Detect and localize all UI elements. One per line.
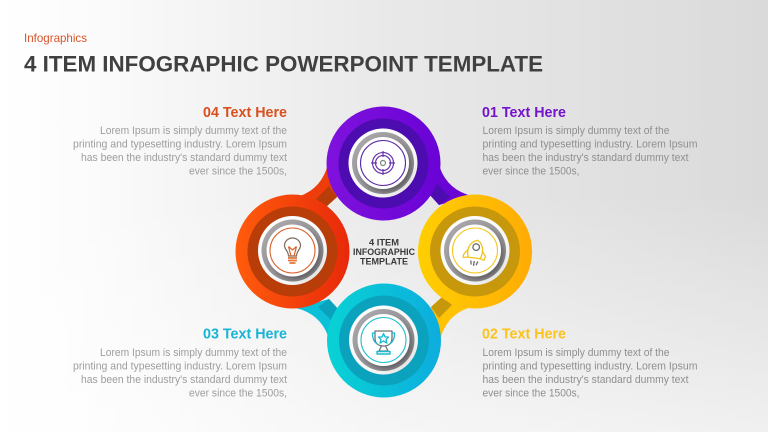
connector: yellow to cyan side bbox=[431, 297, 468, 340]
body 02: Lorem Ipsum is simply dummy text of the bbox=[482, 347, 670, 359]
heading 04: 04 Text Here bbox=[203, 104, 287, 121]
body 02: has been the industry's standard dummy text bbox=[482, 374, 688, 386]
text block: 03 bbox=[73, 326, 287, 400]
body 02: printing and typesetting industry. Lorem Ipsum bbox=[482, 360, 698, 372]
icon: light bulb bbox=[284, 238, 300, 263]
body 01: printing and typesetting industry. Lorem Ipsum bbox=[482, 138, 698, 150]
icon: trophy bbox=[372, 331, 394, 354]
body 03 bbox=[73, 347, 287, 400]
body 01: ever since the 1500s, bbox=[482, 166, 580, 178]
body 04: has been the industry's standard dummy text bbox=[81, 152, 287, 164]
eyebrow label: Infographics bbox=[24, 31, 87, 45]
body 02 bbox=[482, 347, 698, 400]
body 01: Lorem Ipsum is simply dummy text of the bbox=[482, 125, 670, 137]
circle: orange with bulb icon bbox=[236, 194, 350, 308]
body 03: printing and typesetting industry. Lorem Ipsum bbox=[73, 360, 287, 372]
center label: INFOGRAPHIC bbox=[353, 247, 415, 258]
body 03: has been the industry's standard dummy text bbox=[81, 374, 287, 386]
circle: yellow with rocket icon bbox=[418, 194, 532, 308]
connector: purple to yellow bbox=[429, 168, 472, 205]
body 03: Lorem Ipsum is simply dummy text of the bbox=[100, 347, 287, 359]
center label: TEMPLATE bbox=[360, 256, 409, 268]
title: 4 ITEM INFOGRAPHIC POWERPOINT TEMPLATE bbox=[24, 52, 543, 76]
heading 01: 01 Text Here bbox=[482, 104, 566, 121]
circle: purple with target icon bbox=[326, 106, 440, 220]
heading 03: 03 Text Here bbox=[203, 326, 287, 342]
icon: target bbox=[371, 151, 395, 175]
body 01 bbox=[482, 125, 698, 178]
heading 02: 02 Text Here bbox=[482, 326, 566, 342]
text block: 01 bbox=[482, 104, 698, 178]
body 01: has been the industry's standard dummy text bbox=[482, 152, 688, 164]
body 04: Lorem Ipsum is simply dummy text of the bbox=[100, 125, 287, 137]
text block: 02 bbox=[482, 326, 698, 400]
body 02: ever since the 1500s, bbox=[482, 388, 580, 400]
body 04: ever since the 1500s, bbox=[189, 166, 287, 178]
text block: 04 bbox=[73, 104, 287, 178]
body 04: printing and typesetting industry. Lorem Ipsum bbox=[73, 138, 287, 150]
body 04 bbox=[73, 125, 287, 178]
connector: cyan to orange side bbox=[296, 299, 339, 336]
connector: orange to purple bbox=[300, 164, 337, 207]
icon: rocket bbox=[462, 239, 488, 267]
center label bbox=[353, 238, 415, 268]
body 03: ever since the 1500s, bbox=[189, 388, 287, 400]
center label: 4 ITEM bbox=[369, 238, 399, 248]
circle: cyan with trophy icon bbox=[327, 284, 441, 398]
